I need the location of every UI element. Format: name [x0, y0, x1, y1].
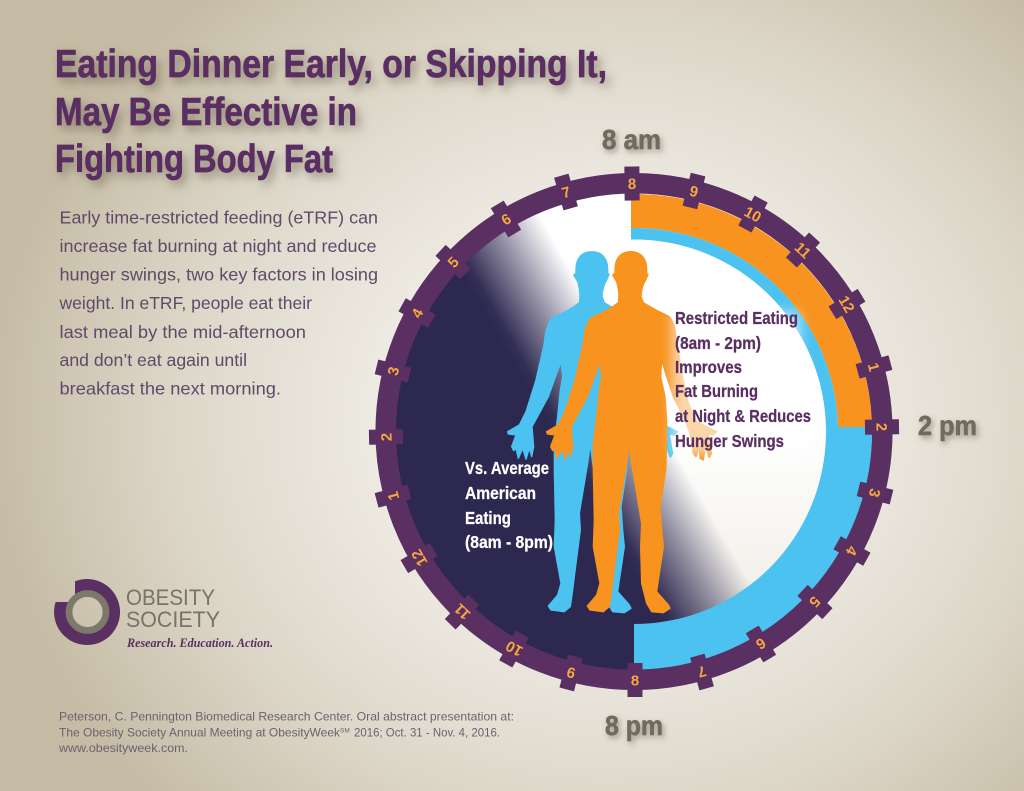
ring hour tabs: 5: [445, 254, 463, 272]
ring hour tabs: 2: [378, 433, 396, 441]
source citation: www.obesityweek.com.: [58, 741, 188, 755]
intro text block: weight. In eTRF, people eat their: [59, 293, 312, 313]
ring hour tabs: 11: [791, 239, 814, 262]
ring hour tabs: 8: [631, 672, 639, 690]
label: average american eating: Vs. Average: [465, 458, 549, 478]
arc: restricted eating 8am-2pm: [631, 194, 872, 427]
intro text block: and don’t eat again until: [60, 350, 247, 370]
intro text block: breakfast the next morning.: [60, 378, 281, 398]
ring hour tabs: 9: [565, 663, 577, 681]
label: 2 pm: 2 pm: [918, 410, 977, 441]
label: average american eating: [465, 458, 553, 552]
logo: Obesity Society: SOCIETY: [126, 607, 220, 632]
ring hour tabs: 4: [841, 543, 861, 559]
ring hour tabs: 6: [753, 634, 768, 653]
label: restricted eating: Restricted Eating: [675, 308, 798, 328]
label: average american eating: American: [465, 483, 536, 503]
ring hour tabs: 2: [872, 423, 890, 431]
title: [55, 43, 607, 181]
logo: Obesity Society: [54, 579, 273, 650]
logo: Obesity Society: Research. Education. Action.: [126, 636, 273, 650]
source citation: Peterson, C. Pennington Biomedical Research Center. Oral abstract presentation at:: [59, 710, 514, 724]
clock diagram: [369, 166, 899, 697]
intro text block: hunger swings, two key factors in losing: [60, 264, 378, 284]
outer purple ring: [386, 183, 882, 680]
label: restricted eating: Improves: [675, 357, 742, 377]
ring hour tabs: 12: [835, 293, 858, 316]
label: restricted eating: Fat Burning: [675, 381, 758, 401]
logo: Obesity Society: OBESITY: [126, 585, 215, 610]
label: restricted eating: Hunger Swings: [675, 431, 784, 451]
label: 8 am: 8 am: [602, 124, 661, 155]
intro text block: last meal by the mid-afternoon: [60, 322, 306, 342]
intro text block: [59, 208, 378, 398]
ring hour tabs: 1: [385, 490, 403, 502]
ring hour tabs: 1: [864, 361, 882, 373]
ring hour tabs: 5: [805, 592, 823, 610]
ring hour tabs: 6: [499, 210, 514, 229]
intro text block: increase fat burning at night and reduce: [60, 236, 376, 256]
label: restricted eating: at Night & Reduces: [675, 406, 811, 426]
ring hour tabs: 3: [385, 365, 403, 377]
white glow behind restricted eating label: [672, 312, 800, 454]
ring hour tabs: 10: [503, 637, 526, 660]
ring hour tabs: 4: [408, 305, 428, 321]
arc: average eating 8am-8pm: [631, 228, 872, 670]
ring hour tabs: 3: [865, 487, 883, 499]
label: average american eating: Eating: [465, 508, 511, 528]
ring hour tabs: 7: [560, 184, 573, 202]
intro text block: Early time-restricted feeding (eTRF) can: [60, 208, 378, 228]
title: May Be Effective in: [55, 91, 357, 134]
ring hour tabs: 7: [695, 662, 708, 680]
source citation: 2016; Oct. 31 - Nov. 4, 2016.: [354, 726, 500, 740]
ring hour tabs: 9: [688, 183, 700, 201]
ring hour tabs: 12: [408, 546, 431, 569]
ring hour tabs: 10: [741, 203, 764, 226]
ring hour tabs: 11: [451, 600, 474, 623]
label: restricted eating: [675, 308, 811, 451]
inner disc: day to night gradient: [394, 192, 874, 672]
title: Eating Dinner Early, or Skipping It,: [55, 43, 607, 86]
ring hour tabs: [369, 166, 899, 697]
title: Fighting Body Fat: [55, 138, 333, 181]
label: average american eating: (8am - 8pm): [465, 532, 553, 552]
source citation: [58, 710, 514, 755]
label: restricted eating: (8am - 2pm): [675, 333, 761, 353]
source citation: SM: [340, 728, 350, 734]
figure: orange body: [547, 252, 717, 613]
ring hour tabs: 8: [628, 176, 636, 193]
figure: blue body: [508, 252, 678, 613]
source citation: The Obesity Society Annual Meeting at ObesityWeek: [59, 726, 341, 740]
label: 8 pm: 8 pm: [605, 710, 663, 741]
